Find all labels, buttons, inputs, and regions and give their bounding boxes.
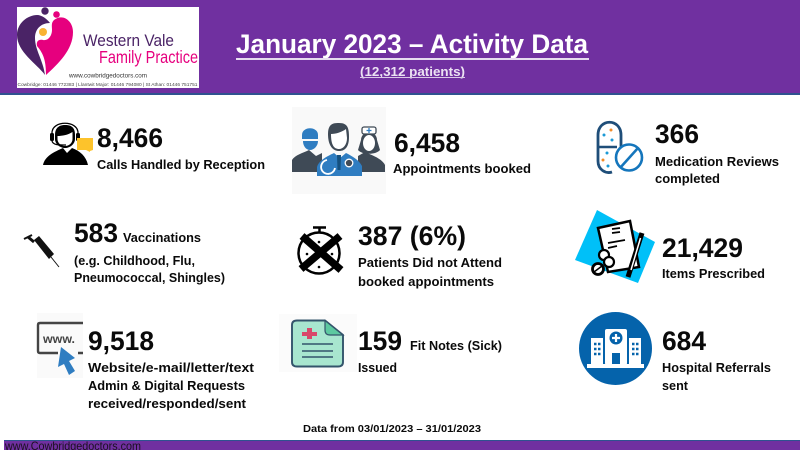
practice logo: Family Practice xyxy=(99,47,198,67)
value: calls: 8,466 xyxy=(97,123,163,153)
label: admin requests line one: Website/e-mail/letter/text xyxy=(88,360,255,375)
label: did not attend: Patients Did not Attend xyxy=(358,255,502,270)
stat: admin and digital requests xyxy=(37,313,255,411)
label: appointments: Appointments booked xyxy=(393,161,531,176)
label: vaccinations: Vaccinations xyxy=(123,230,201,245)
data period note: Data from 03/01/2023 – 31/01/2023 xyxy=(303,423,481,435)
icon: sick note document xyxy=(279,314,357,372)
stat: appointments xyxy=(292,107,531,194)
icon: medical team xyxy=(292,107,386,194)
label: admin requests line three: received/responded/sent xyxy=(88,396,247,411)
footer band xyxy=(4,439,800,450)
value: medication reviews: 366 xyxy=(655,119,699,149)
stat: vaccinations xyxy=(24,218,225,285)
label: items prescribed: Items Prescribed xyxy=(662,266,765,281)
stat: calls handled xyxy=(43,123,265,172)
label: booked appointments: booked appointments xyxy=(358,274,494,289)
practice logo: Cowbridge: 01446 772383 | Llantwit Major: 01446 794080 | St Athan: 01446 751751 xyxy=(18,82,198,87)
stat: medication reviews xyxy=(598,119,779,186)
icon: call handler headset xyxy=(43,123,93,165)
stat: did not attend xyxy=(298,221,502,289)
label: vaccination examples: (e.g. Childhood, Flu, xyxy=(74,253,195,268)
stat: fit notes xyxy=(279,314,502,375)
label: medication reviews: Medication Reviews xyxy=(655,154,779,169)
value: did not attend: 387 (6%) xyxy=(358,221,466,251)
title: January 2023 – Activity Data xyxy=(236,29,589,59)
value: hospital referrals: 684 xyxy=(662,326,706,356)
stat: items prescribed xyxy=(575,210,765,283)
label: fit notes: Fit Notes (Sick) xyxy=(410,338,502,353)
icon: hospital in blue circle xyxy=(579,312,652,385)
value: items prescribed: 21,429 xyxy=(662,233,743,263)
icon: www browser with cursor: www. xyxy=(42,332,75,346)
label: sent: sent xyxy=(662,378,689,393)
label: vaccination examples line two: Pneumococcal, Shingles) xyxy=(74,270,225,285)
icon: crossed-out stopwatch xyxy=(298,228,341,274)
subtitle: patients: (12,312 patients) xyxy=(360,65,465,79)
label: issued: Issued xyxy=(358,360,397,375)
stat: hospital referrals xyxy=(579,312,771,393)
icon: syringe xyxy=(24,235,59,267)
header band xyxy=(0,0,800,95)
icon: capsule with prohibition sign xyxy=(598,122,642,173)
practice logo: www.cowbridgedoctors.com xyxy=(68,74,147,80)
icon: prescription and pills xyxy=(575,210,655,283)
label: calls: Calls Handled by Reception xyxy=(97,157,265,172)
label: admin requests line two: Admin & Digital Requests xyxy=(88,378,245,393)
value: admin requests: 9,518 xyxy=(88,326,154,356)
value: appointments: 6,458 xyxy=(394,128,460,158)
practice logo: Western Vale xyxy=(83,32,174,50)
label: completed: completed xyxy=(655,171,720,186)
practice logo xyxy=(17,7,199,88)
value: vaccinations: 583 xyxy=(74,218,118,248)
label: hospital referrals: Hospital Referrals xyxy=(662,360,771,375)
value: fit notes: 159 xyxy=(358,326,402,356)
icon: www browser with cursor xyxy=(37,313,83,378)
